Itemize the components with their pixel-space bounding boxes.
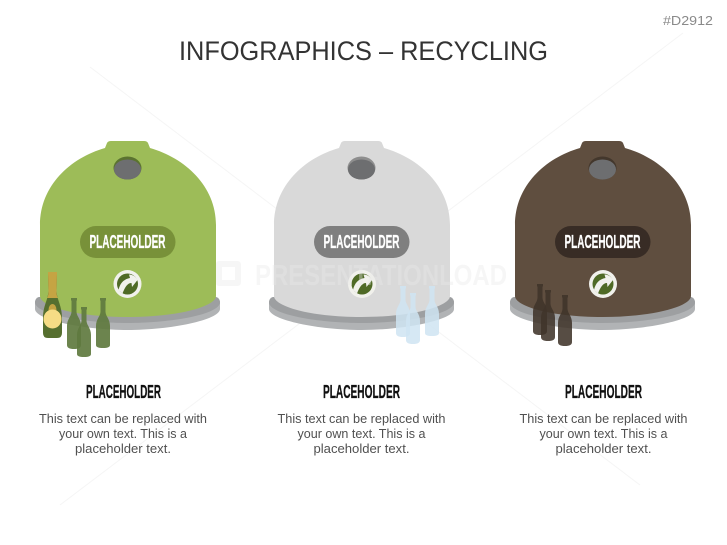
insertion hole [588,156,616,180]
bin base [510,297,695,330]
text block: green [39,382,207,456]
text block: green: This text can be replaced with [39,411,207,426]
text block: brown: your own text. This is a [540,426,668,441]
text block: grey [278,382,446,456]
green bottle 2 [77,307,91,357]
label pill [80,226,176,258]
text block: green: your own text. This is a [59,426,188,441]
insertion hole [114,156,142,180]
document code: #D2912 [663,13,713,28]
insertion hole [348,156,376,180]
title: INFOGRAPHICS – RECYCLING [179,36,548,66]
brown bottle 2 [541,290,555,341]
bin: grey [269,141,454,344]
text block: brown: This text can be replaced with [520,411,688,426]
glass bottle 2 [406,293,420,344]
label pill: PLACEHOLDER [90,232,166,252]
text block: brown [520,382,688,456]
label pill [314,226,410,258]
text block: green: PLACEHOLDER [86,382,161,402]
bin body [40,141,216,317]
green bottle 3 [96,298,110,348]
brown bottle 3 [558,295,572,346]
bin body [515,141,691,317]
bin: brown [510,141,695,346]
glass bottle 1 [396,286,410,337]
icon: recycling symbol [589,270,617,298]
label pill [555,226,650,258]
text block: green: placeholder text. [75,441,171,456]
champagne bottle [43,272,62,338]
watermark: PRESENTATIONLOAD [255,260,507,292]
green bottle 1 [67,298,81,349]
text block: grey: your own text. This is a [298,426,426,441]
glass bottle 3 [425,286,439,336]
label pill: PLACEHOLDER [324,232,400,252]
brown bottle 1 [533,284,547,335]
text block: brown: placeholder text. [556,441,652,456]
background diagonal lines [60,33,683,505]
text block: brown: PLACEHOLDER [565,382,642,402]
bin base [269,297,454,330]
bin body [274,141,450,317]
bin: green [35,141,220,357]
icon: recycling symbol [348,270,376,298]
bin base [35,297,220,330]
text block: grey: This text can be replaced with [278,411,446,426]
text block: grey: placeholder text. [314,441,410,456]
icon: recycling symbol [114,270,142,298]
label pill: PLACEHOLDER [564,232,640,252]
text block: grey: PLACEHOLDER [323,382,400,402]
